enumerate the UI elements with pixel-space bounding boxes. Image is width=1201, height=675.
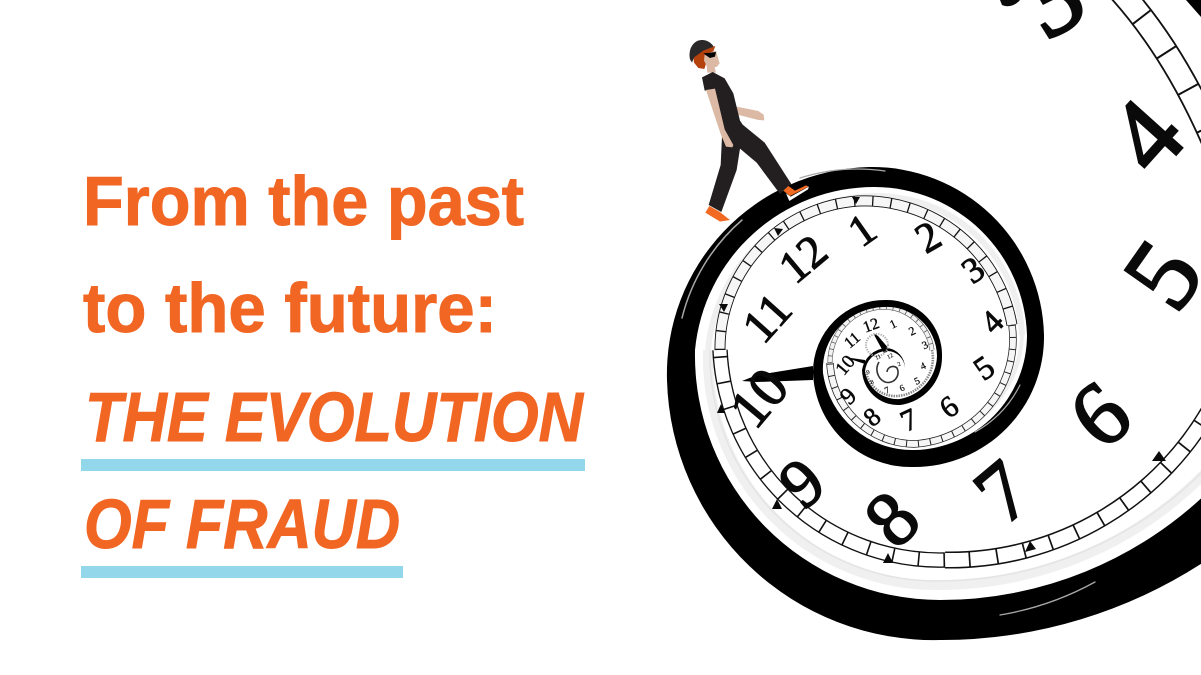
black spiral band — [667, 167, 1201, 640]
near arm — [706, 89, 733, 147]
numerals: middle arm: 9 — [835, 383, 862, 410]
numerals: outer arm: 7 — [957, 443, 1049, 541]
sunglasses — [703, 52, 716, 58]
face and neck — [704, 51, 720, 73]
numerals: middle arm: 10 — [831, 351, 860, 380]
numerals: inner arm: 9 — [866, 370, 871, 376]
numerals: inner arm: 2 — [897, 362, 902, 368]
bezel shading — [708, 196, 1201, 585]
numerals: inner arm: 11 — [875, 354, 882, 362]
underline 2 — [81, 566, 403, 578]
numerals: middle arm: 5 — [967, 349, 1002, 388]
numerals: outer arm: 8 — [847, 474, 936, 563]
numerals: middle arm: 11 — [841, 329, 864, 352]
numerals: middle arm: 6 — [934, 390, 965, 425]
numerals: inner arm: 5 — [913, 376, 922, 388]
numerals: inner arm — [866, 316, 931, 395]
numerals: outer arm: 9 — [764, 443, 839, 523]
numerals: middle arm: 2 — [908, 213, 949, 263]
numerals: inner arm: 4 — [919, 361, 928, 373]
heading line 4: OF FRAUD — [84, 485, 400, 563]
numerals: middle arm: 4 — [974, 304, 1011, 341]
numerals: inner arm: 6 — [898, 382, 907, 393]
numerals: middle arm: 7 — [895, 402, 923, 438]
numerals: outer arm: 11 — [732, 283, 802, 353]
numerals: outer arm — [718, 0, 1201, 563]
front shoe — [783, 185, 809, 201]
numerals: inner arm: 1 — [887, 316, 899, 332]
numerals: inner arm: 7 — [883, 384, 892, 395]
numerals: outer arm: 10 — [718, 357, 801, 440]
numerals: middle arm: 12 — [861, 315, 882, 336]
title — [81, 162, 585, 578]
torso and legs — [702, 72, 791, 212]
numerals: inner arm: 3 — [920, 339, 931, 352]
beanie — [690, 40, 714, 63]
heading line 3: THE EVOLUTION — [85, 378, 584, 456]
numerals: inner arm: 2 — [906, 323, 918, 339]
far arm — [737, 107, 764, 120]
heading line 1: From the past — [83, 162, 524, 240]
numerals: middle arm — [831, 204, 1011, 438]
walking man figure — [690, 40, 809, 225]
underline 1 — [81, 459, 585, 471]
numerals: inner arm: 8 — [870, 380, 875, 386]
back shoe — [705, 206, 730, 225]
inner swirl — [877, 362, 898, 382]
numerals: middle arm: 1 — [839, 204, 885, 256]
hour markers — [717, 197, 1166, 563]
minute track rings — [720, 0, 1201, 560]
spiral clock — [667, 0, 1201, 640]
hair — [693, 46, 715, 69]
clock hands — [742, 333, 890, 382]
corner of outer band — [1186, 0, 1201, 17]
band highlights — [682, 169, 1095, 615]
numerals: outer arm: 6 — [1051, 363, 1149, 468]
numerals: outer arm: 12 — [769, 224, 837, 293]
numerals: middle arm: 8 — [858, 402, 886, 432]
heading line 2: to the future: — [83, 269, 497, 347]
numeral fragment at top edge — [1000, 0, 1020, 6]
numerals: inner arm: 12 — [886, 353, 894, 361]
numerals: middle arm: 3 — [954, 248, 992, 291]
ghost inner dial — [866, 334, 888, 356]
